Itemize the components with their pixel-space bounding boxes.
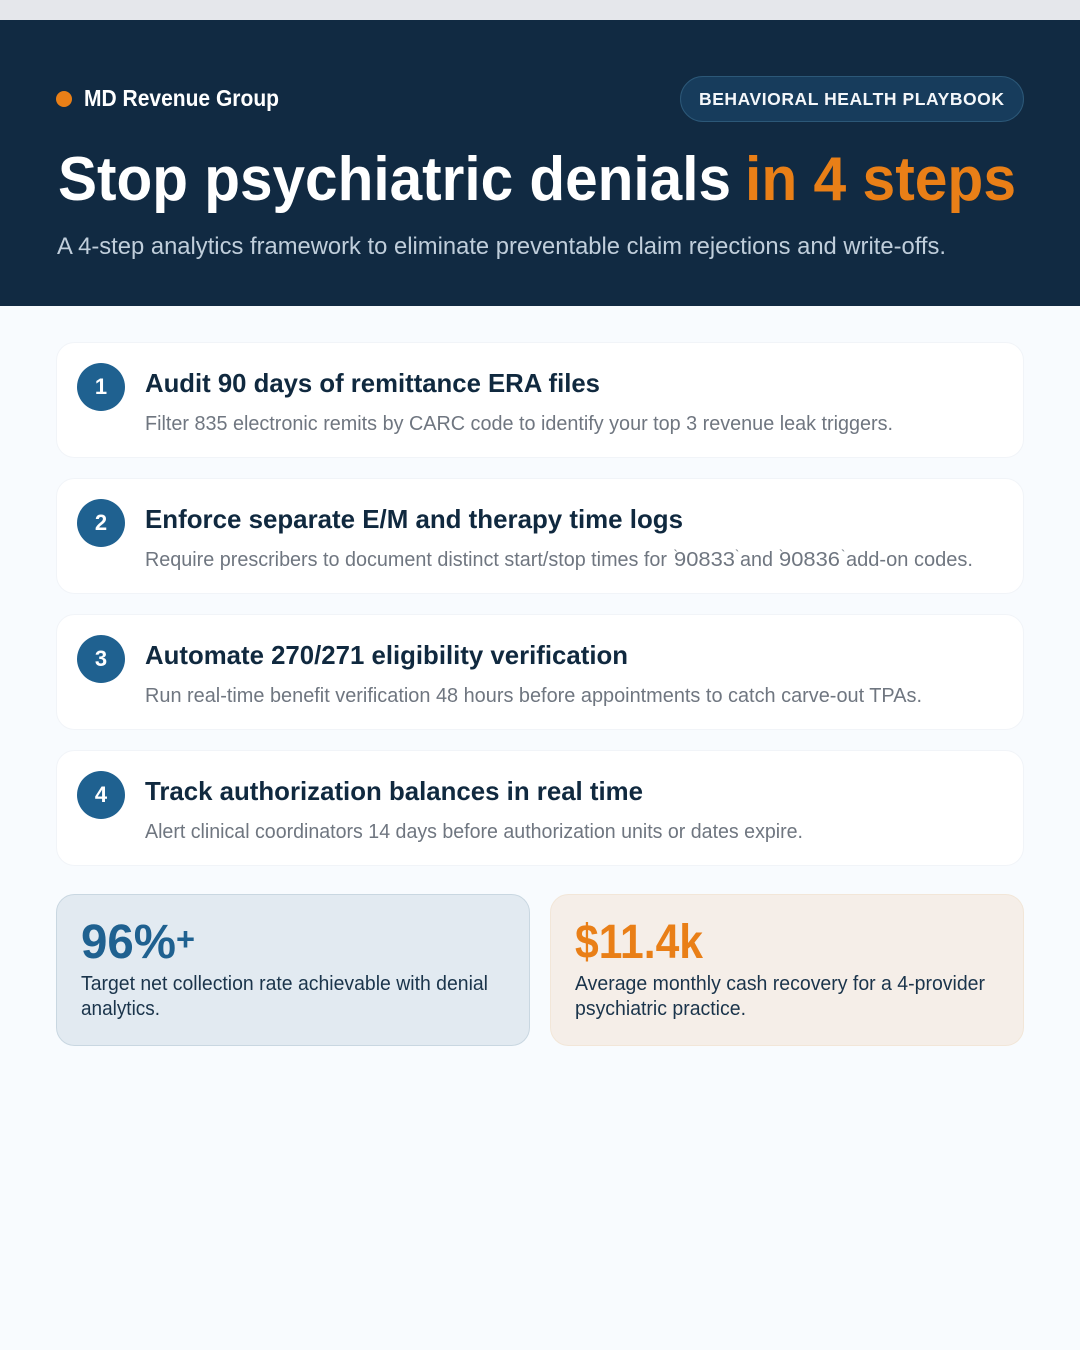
- step number 3: 3: [95, 646, 107, 671]
- stat value 96%+: 96%: [81, 916, 176, 969]
- step 2 description: `: [735, 547, 739, 562]
- step number 4: [77, 771, 125, 819]
- step 2 description: `: [841, 547, 845, 562]
- header panel: [0, 20, 1080, 306]
- step 2 description: Require prescribers to document distinct start/stop times for: [145, 549, 667, 571]
- badge: behavioral health playbook: [680, 76, 1024, 122]
- step 2 description: `: [779, 547, 783, 562]
- step number 3: [77, 635, 125, 683]
- step 3 heading: Automate 270/271 eligibility verification: [145, 640, 628, 670]
- step 1 heading: Audit 90 days of remittance ERA files: [145, 368, 600, 398]
- step 2 description: 90836: [779, 549, 840, 571]
- stat description: [81, 973, 488, 1020]
- step 4 heading: Track authorization balances in real time: [145, 776, 643, 806]
- stat description: psychiatric practice.: [575, 998, 746, 1020]
- stat panel: monthly cash recovery: [550, 894, 1024, 1046]
- stat panel: net collection rate: [56, 894, 530, 1046]
- stat description: [575, 973, 985, 1020]
- stat description: Target net collection rate achievable with denial: [81, 973, 488, 995]
- step 2 description: `: [674, 547, 678, 562]
- step 1 description: Filter 835 electronic remits by CARC code to identify your top 3 revenue leak triggers.: [145, 413, 893, 435]
- title: in 4 steps: [745, 145, 1016, 214]
- step 3 description: Run real-time benefit verification 48 hours before appointments to catch carve-out TPAs.: [145, 685, 922, 707]
- stat description: analytics.: [81, 998, 160, 1020]
- step 2 heading: Enforce separate E/M and therapy time logs: [145, 504, 683, 534]
- step number 4: 4: [95, 782, 108, 807]
- stat value 96%+: +: [176, 921, 195, 957]
- step number 1: [77, 363, 125, 411]
- title: Stop psychiatric denials: [58, 145, 731, 214]
- step 4 description: Alert clinical coordinators 14 days before authorization units or dates expire.: [145, 821, 803, 843]
- step 2 description: [145, 547, 973, 571]
- step 2 description: and: [740, 549, 773, 571]
- step 2 description: 90833: [674, 549, 735, 571]
- badge: behavioral health playbook: BEHAVIORAL HEALTH PLAYBOOK: [699, 89, 1004, 109]
- subtitle: A 4-step analytics framework to eliminate preventable claim rejections and write-offs.: [57, 233, 946, 260]
- stat value $11.4k: $11.4k: [575, 916, 703, 969]
- step 2 description: add-on codes.: [846, 549, 973, 571]
- step card 4: [56, 750, 1024, 866]
- step number 2: [77, 499, 125, 547]
- brand logo and name: MD Revenue Group: [84, 85, 279, 111]
- step number 2: 2: [95, 510, 107, 535]
- step card 2: [56, 478, 1024, 594]
- stat description: Average monthly cash recovery for a 4-provider: [575, 973, 985, 995]
- step card 3: [56, 614, 1024, 730]
- step number 1: 1: [95, 374, 107, 399]
- step card 1: [56, 342, 1024, 458]
